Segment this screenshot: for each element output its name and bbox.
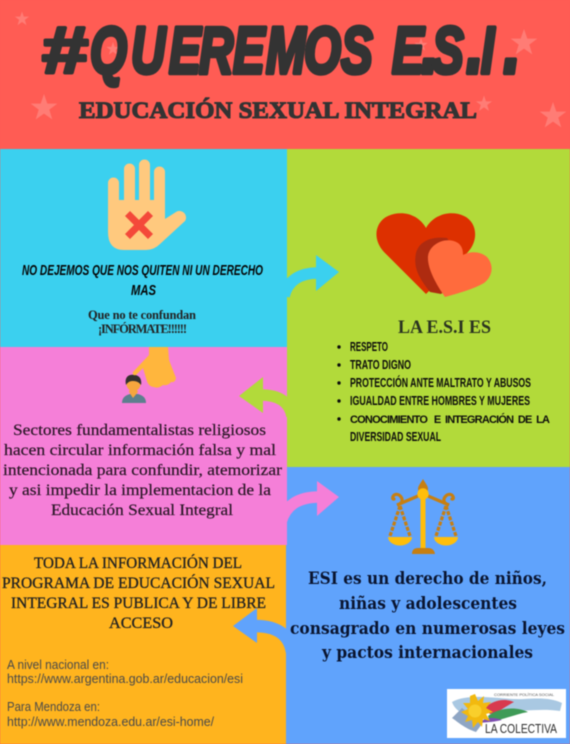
panel: blue rights	[286, 467, 570, 744]
panel: green what ESI is	[287, 149, 570, 467]
text: ESI es un derecho: y pactos internacionales	[321, 643, 533, 663]
background stars	[15, 12, 566, 127]
heading: public information: ACCESO	[109, 615, 173, 632]
text: sectores fundamentalistas: Educación Sexual Integral	[51, 502, 234, 519]
heading: public information: TODA LA INFORMACIÓN DEL	[34, 553, 242, 572]
heading: la ESI es: LA E.S.I ES	[398, 318, 491, 338]
title: #	[41, 13, 87, 87]
arrow: blue to green panel	[284, 255, 339, 296]
arrow: blue to orange panel	[233, 608, 292, 652]
text: informate: ¡INFÓRMATE!!!!!!	[98, 322, 187, 336]
title: QUEREMOS	[90, 14, 373, 88]
icon: hearts	[376, 213, 492, 297]
icon: hand over person	[122, 347, 176, 403]
heading: no dejemos	[22, 262, 263, 299]
text: links: https://www.argentina.gob.ar/educacion/esi	[7, 672, 243, 686]
logo: La Colectiva: CORRIENTE POLÍTICA SOCIAL	[494, 692, 555, 697]
panel: pink misinformation	[0, 347, 287, 545]
panel: orange public information	[0, 545, 286, 744]
heading: public information	[2, 553, 275, 632]
title: E	[392, 14, 425, 88]
panel: header	[0, 0, 570, 149]
heading: no dejemos: MAS	[131, 282, 156, 299]
text: sectores fundamentalistas: y asi impedir la implementacion de la	[9, 482, 271, 499]
icon: scales of justice	[388, 479, 458, 554]
list: values	[337, 340, 550, 444]
heading: public information: PROGRAMA DE EDUCACIÓN SEXUAL	[2, 573, 275, 592]
list: values: DIVERSIDAD SEXUAL	[350, 430, 441, 444]
heading: no dejemos: NO DEJEMOS QUE NOS QUITEN NI UN DERECHO	[22, 262, 263, 279]
text: ESI es un derecho	[290, 569, 565, 663]
text: links: A nivel nacional en:	[7, 658, 109, 672]
text: links: http://www.mendoza.edu.ar/esi-home/	[7, 715, 215, 729]
title: S	[432, 14, 464, 88]
arrow: green to pink panel	[239, 377, 292, 416]
list: values: CONOCIMIENTO E INTEGRACIÓN DE LA	[350, 413, 550, 426]
title	[41, 0, 521, 93]
text: sectores fundamentalistas: intencionada para confundir, atemorizar	[3, 462, 283, 479]
text: ESI es un derecho: niñas y adolescentes	[339, 594, 517, 614]
panel: blue do not let rights be taken	[0, 149, 287, 347]
list: values: TRATO DIGNO	[350, 358, 411, 372]
text: links	[7, 658, 243, 729]
text: links: Para Mendoza en:	[7, 700, 100, 714]
title: I	[481, 14, 495, 88]
heading: public information: INTEGRAL ES PUBLICA Y DE LIBRE	[11, 595, 266, 612]
logo: La Colectiva	[447, 689, 566, 738]
icon: stop hand	[108, 160, 186, 250]
text: informate	[88, 308, 196, 336]
text: sectores fundamentalistas	[3, 422, 283, 519]
subtitle: EDUCACIÓN SEXUAL INTEGRAL	[79, 97, 477, 123]
text: sectores fundamentalistas: hacen circular información falsa y mal	[4, 442, 277, 459]
text: ESI es un derecho: ESI es un derecho de niños,	[308, 569, 547, 589]
text: informate: Que no te confundan	[88, 308, 196, 322]
arrow: pink to blue panel	[281, 481, 339, 522]
text: sectores fundamentalistas: Sectores fundamentalistas religiosos	[13, 422, 266, 439]
list: values: RESPETO	[350, 340, 388, 354]
